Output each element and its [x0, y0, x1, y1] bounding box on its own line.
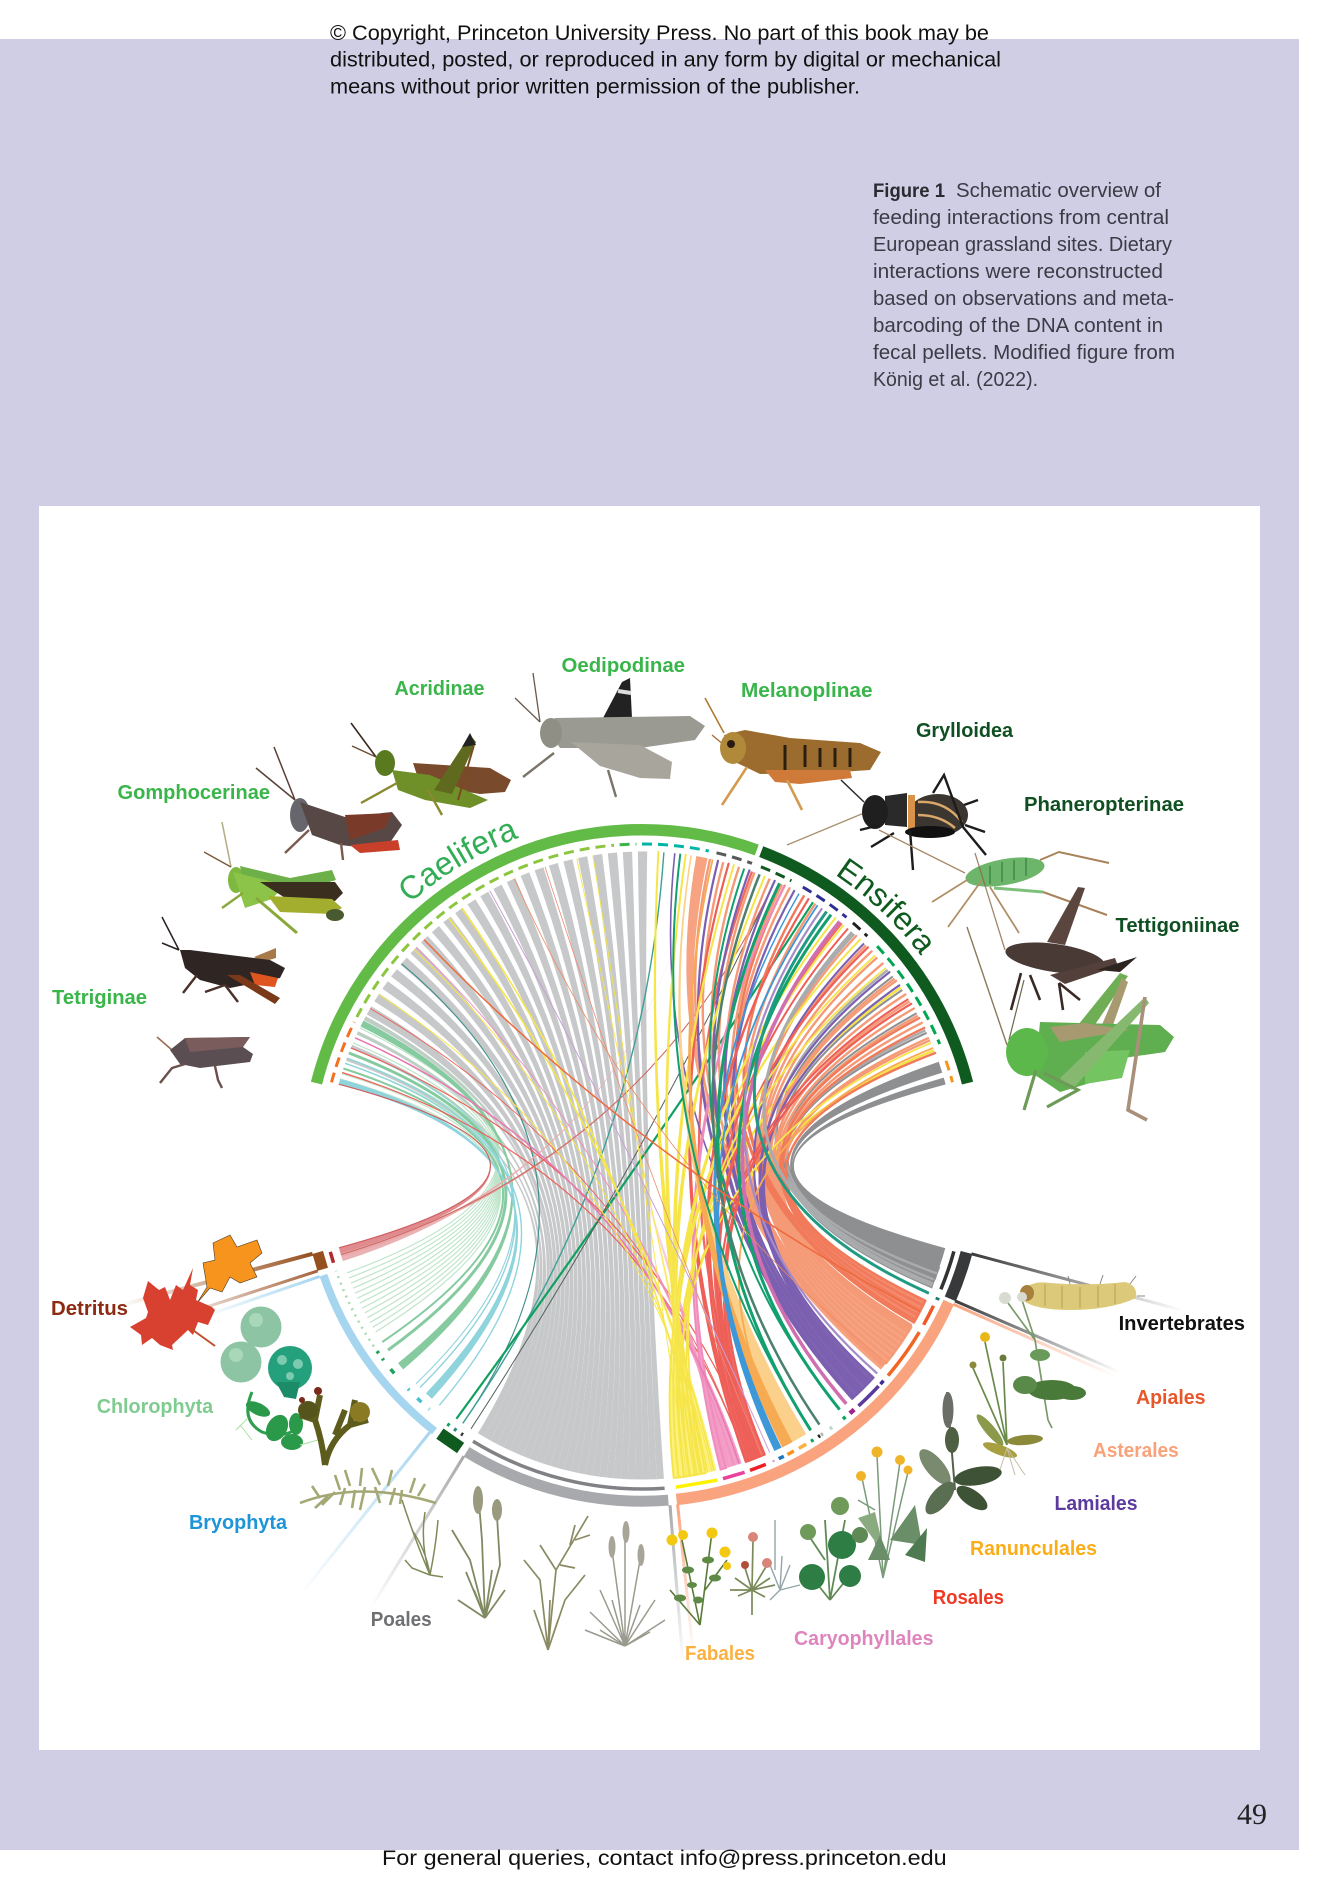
curved label: Ensifera: Ensifera: [836, 858, 931, 956]
figure caption: feeding interactions from central: [873, 207, 1169, 229]
label: Acridinae: Acridinae: [394, 678, 484, 700]
food order inner track: [330, 1251, 954, 1489]
copyright notice: © Copyright, Princeton University Press. No part of this book may be: [330, 21, 989, 45]
figure caption: [873, 180, 1175, 391]
algae icon: spheres: [220, 1306, 282, 1382]
label: Melanoplinae: Melanoplinae: [741, 680, 872, 702]
figure caption: fecal pellets. Modified figure from: [873, 342, 1175, 364]
outer block: Detritus: [318, 1252, 323, 1269]
figure caption: König et al. (2022).: [873, 369, 1038, 391]
insect icon: Melanoplinae: [705, 698, 881, 810]
ribbons: Asterales: [687, 856, 929, 1369]
insect icon: Gomphocerinae: [256, 747, 402, 860]
ribbons: Chlorophyta and Bryophyta: [339, 852, 813, 1429]
leaf icon: maple: [130, 1268, 215, 1350]
curved label: Caelifera: Caelifera: [400, 824, 519, 898]
flower icon: Ranunculales: [856, 1446, 927, 1578]
flower icon: Caryophyllales: [730, 1520, 800, 1615]
ribbons: Lamiales: [671, 853, 899, 1399]
white figure panel: [39, 506, 1260, 1750]
label: Gomphocerinae: Gomphocerinae: [118, 782, 270, 804]
leaf icon: oak: [197, 1235, 262, 1303]
figure caption: Schematic overview of: [956, 180, 1161, 202]
label: Invertebrates: Invertebrates: [1119, 1313, 1245, 1335]
chord diagram: [127, 824, 1174, 1649]
label: Apiales: Apiales: [1136, 1387, 1206, 1409]
subfamily dashed track: [332, 844, 952, 1082]
outer fading rays: [120, 1254, 1183, 1664]
label: Phaneropterinae: Phaneropterinae: [1024, 794, 1184, 816]
label: Chlorophyta: Chlorophyta: [97, 1396, 214, 1418]
insect icon: Phaneropterinae: [879, 830, 1109, 933]
label: Detritus: Detritus: [51, 1298, 128, 1320]
grass icon: plant 4: [585, 1521, 665, 1646]
insect icon: green grasshopper: [204, 822, 344, 933]
figure caption: interactions were reconstructed: [873, 261, 1163, 283]
insect icon: Oedipodinae: [515, 673, 705, 797]
plant icon: Lamiales rosette: [914, 1392, 1003, 1519]
flower icon: Lady's mantle: [799, 1497, 868, 1600]
outer block: dark green: [440, 1434, 461, 1448]
label: Asterales: Asterales: [1093, 1440, 1179, 1462]
ribbons: Apiales: [736, 886, 935, 1322]
plant icon: Asterales: [970, 1332, 1043, 1475]
copyright notice: means without prior written permission of the publisher.: [330, 74, 860, 98]
insect icon: Tetriginae: [157, 1037, 253, 1088]
grass icon: plant 2: [452, 1486, 505, 1618]
ribbons: Invertebrates: [776, 976, 945, 1287]
outer arc: Bryophyta and Chlorophyta: [323, 1275, 434, 1431]
label: Rosales: Rosales: [933, 1587, 1004, 1609]
outer block: Invertebrates: [950, 1252, 966, 1299]
label: Tetriginae: Tetriginae: [52, 987, 147, 1009]
label: Oedipodinae: Oedipodinae: [562, 655, 685, 677]
plant icon: Apiales: [999, 1292, 1086, 1428]
outer arc: Poales: [467, 1452, 668, 1501]
outer arc: Ensifera: [761, 852, 968, 1083]
figure caption: based on observations and meta-: [873, 288, 1174, 310]
moss icon: green filament: [236, 1392, 318, 1450]
label: Poales: Poales: [371, 1609, 432, 1631]
ribbons: extra mixed strands: [674, 859, 937, 1478]
label: Bryophyta: Bryophyta: [189, 1512, 288, 1534]
ribbons: Rosales: [342, 864, 911, 1462]
copyright notice: [330, 21, 1001, 98]
insect icon: dark bush-cricket: [975, 853, 1137, 1010]
footer contact line: For general queries, contact info@press.princeton.edu: [382, 1846, 947, 1870]
grass icon: plant 3: [524, 1516, 590, 1650]
insect icon: Grylloidea: [787, 775, 986, 870]
labels: [51, 655, 1245, 1665]
insect icon: dark grasshopper: [162, 917, 285, 1004]
moss icon: olive sprig: [300, 1468, 436, 1510]
label: Caryophyllales: Caryophyllales: [794, 1628, 934, 1650]
insect icon: great green bush-cricket: [967, 927, 1174, 1120]
label: Tettigoniinae: Tettigoniinae: [1116, 915, 1240, 937]
caterpillar icon: Invertebrates: [1020, 1275, 1145, 1310]
ribbons: Caryophyllales: [355, 870, 785, 1470]
ribbons: Fabales: [379, 852, 931, 1478]
figure caption: European grassland sites. Dietary: [873, 234, 1172, 256]
lichen icon: [298, 1387, 370, 1465]
figure caption: barcoding of the DNA content in: [873, 315, 1163, 337]
insect icon: Acridinae: [351, 723, 511, 815]
label: Fabales: Fabales: [685, 1643, 755, 1665]
ribbons: Detritus: [339, 856, 775, 1261]
ribbons: grey Poales: [346, 852, 664, 1480]
copyright notice: distributed, posted, or reproduced in any form by digital or mechanical: [330, 48, 1001, 72]
algae icon: teal colony: [268, 1346, 312, 1399]
label: Ranunculales: Ranunculales: [970, 1538, 1097, 1560]
label: Lamiales: Lamiales: [1054, 1493, 1138, 1515]
outer arc: flowering plants: [676, 1302, 949, 1500]
label: Grylloidea: Grylloidea: [916, 720, 1014, 742]
outer arc: Caelifera: [316, 830, 757, 1083]
figure caption: Figure 1: [873, 181, 945, 202]
page number: 49: [1237, 1798, 1267, 1831]
grass icon: plant 1: [402, 1500, 443, 1577]
flower icon: Fabales: [666, 1528, 731, 1625]
ribbons: Ranunculales and thin orders: [424, 854, 933, 1456]
